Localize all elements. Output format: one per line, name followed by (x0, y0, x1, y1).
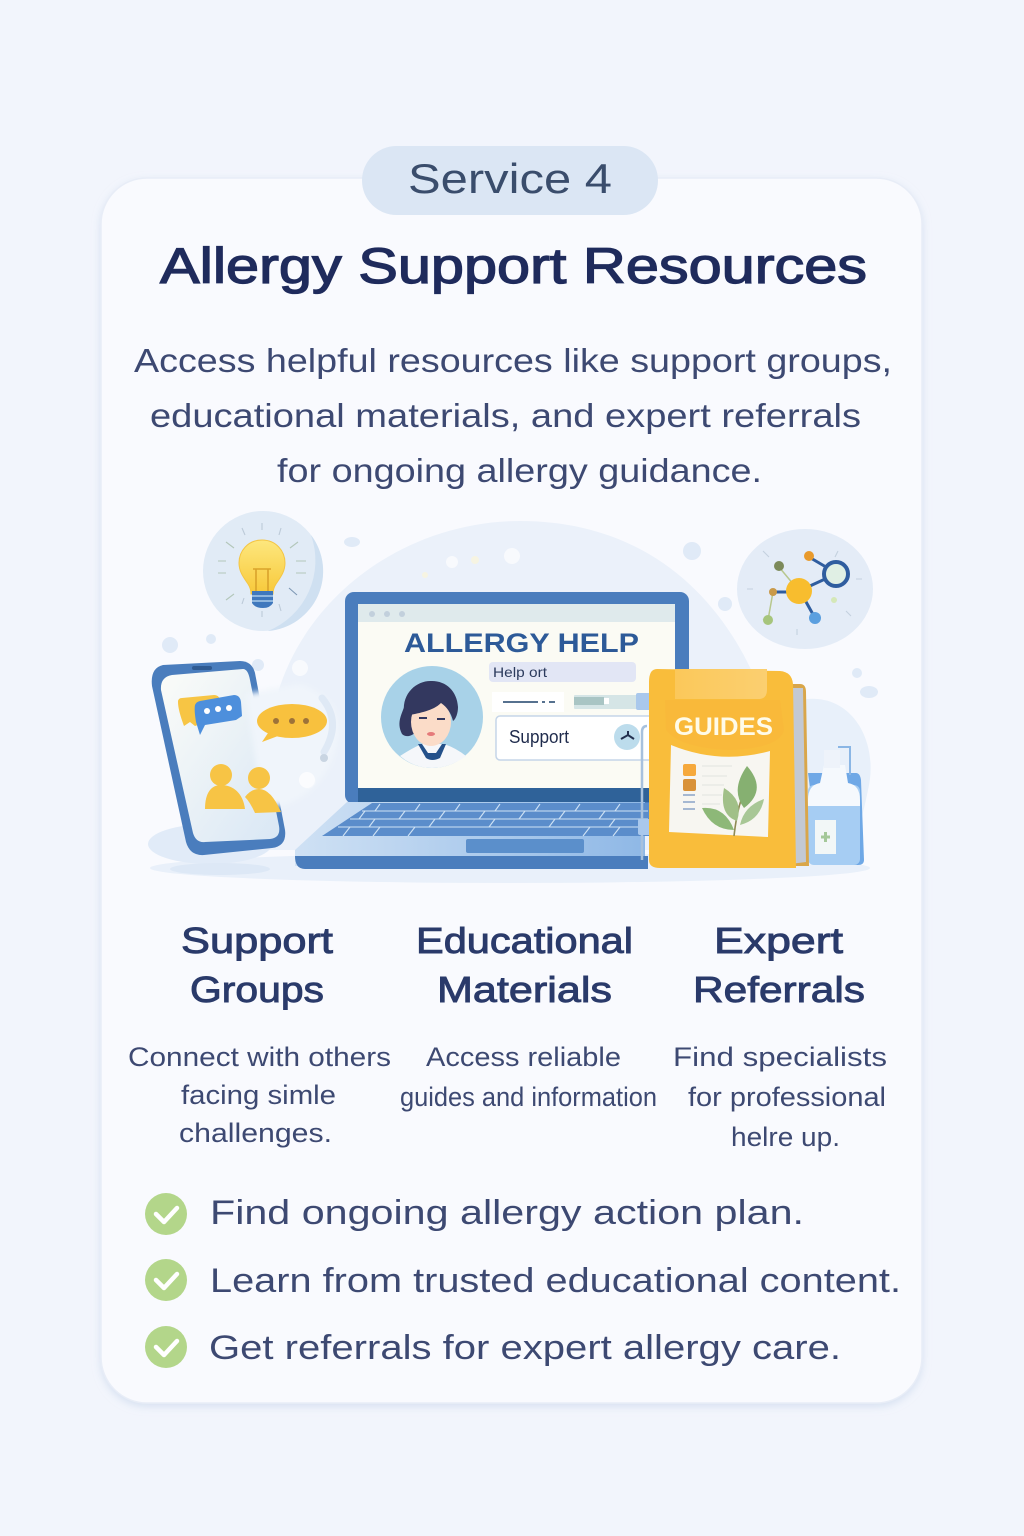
icon: light bulb (203, 511, 323, 631)
feature column: expert referrals: Find specialists (673, 1042, 887, 1072)
icon: guides book (649, 669, 809, 868)
check item 1: Find ongoing allergy action plan. (210, 1194, 804, 1232)
check item 3 (145, 1326, 841, 1368)
search label bar (489, 662, 636, 682)
icon: molecule network (737, 529, 873, 649)
icon: hand sanitizer bottles (808, 747, 864, 865)
support field: Support (509, 727, 569, 747)
checklist (145, 1193, 901, 1368)
intro text (134, 342, 892, 489)
feature column: educational materials (400, 920, 657, 1112)
feature column: expert referrals: Expert (714, 920, 843, 961)
feature column: expert referrals: for professional (688, 1082, 886, 1112)
guides label: GUIDES (674, 713, 773, 741)
plant leaves (702, 766, 764, 836)
check item 2: Learn from trusted educational content. (210, 1262, 901, 1300)
support field (496, 716, 656, 760)
feature column: support groups: Support (181, 920, 333, 961)
checklist (683, 764, 732, 809)
clips (636, 693, 660, 860)
feature column: expert referrals: Referrals (693, 969, 865, 1010)
soft blob hiding phone edge (246, 684, 339, 806)
illustration: allergy help resources (148, 511, 878, 883)
intro text: for ongoing allergy guidance. (277, 452, 762, 489)
progress row (492, 692, 640, 712)
feature column: support groups: Groups (190, 969, 324, 1010)
service badge (362, 146, 658, 215)
title: Allergy Support Resources (160, 238, 867, 294)
intro text: educational materials, and expert referrals (150, 397, 861, 434)
feature column: expert referrals (673, 920, 887, 1152)
check item 3: Get referrals for expert allergy care. (209, 1329, 841, 1367)
feature column: educational materials: Educational (416, 920, 633, 961)
feature column: educational materials: Access reliable (426, 1042, 621, 1072)
feature column: support groups: facing simle (181, 1080, 336, 1110)
feature column: expert referrals: helre up. (731, 1122, 840, 1152)
panel: service card (101, 178, 922, 1403)
yellow speech bubble (257, 704, 327, 742)
service badge: Service 4 (408, 155, 612, 202)
feature column: support groups: Connect with others (128, 1042, 391, 1072)
feature column: educational materials: guides and information (400, 1082, 657, 1112)
check item 1 (145, 1193, 804, 1235)
people (205, 764, 281, 813)
chat bubbles (178, 695, 242, 735)
icon: phone with chat (152, 661, 339, 855)
feature column: support groups: challenges. (179, 1118, 332, 1148)
laptop (295, 592, 689, 869)
laptop heading: ALLERGY HELP (404, 628, 639, 658)
search label bar: Help ort (493, 664, 547, 680)
feature column: support groups (128, 920, 391, 1148)
avatar (381, 666, 483, 768)
feature column: educational materials: Materials (437, 969, 612, 1010)
intro text: Access helpful resources like support groups, (134, 342, 892, 379)
background dome (148, 521, 878, 883)
